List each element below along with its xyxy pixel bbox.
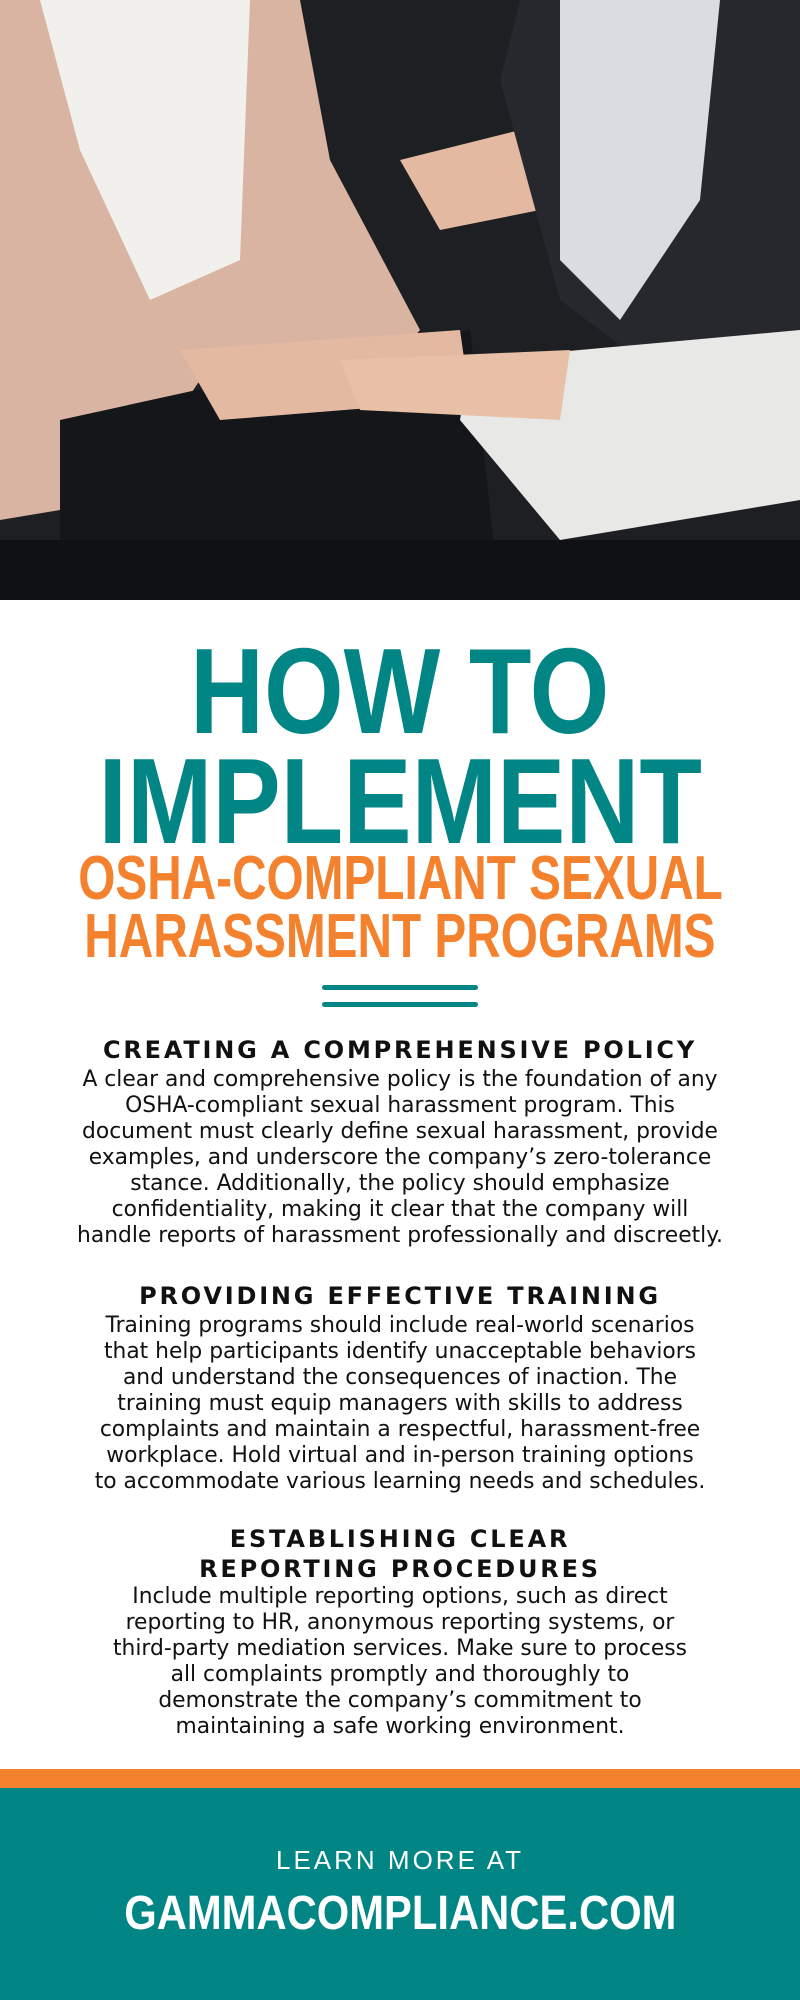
- heading: ESTABLISHING CLEAR: [230, 1525, 570, 1553]
- heading: REPORTING PROCEDURES: [199, 1555, 601, 1583]
- body text: reporting to HR, anonymous reporting systems, or: [126, 1610, 674, 1635]
- learn more text: LEARN MORE AT: [276, 1845, 524, 1875]
- body text: [95, 1313, 705, 1494]
- body text: and understand the consequences of inaction. The: [123, 1365, 677, 1390]
- section: reporting procedures: [113, 1525, 687, 1739]
- subtitle: HARASSMENT PROGRAMS: [84, 902, 716, 971]
- body text: [113, 1584, 687, 1739]
- body text: third-party mediation services. Make sure to process: [113, 1636, 687, 1661]
- heading: CREATING A COMPREHENSIVE POLICY: [103, 1036, 697, 1064]
- section: comprehensive policy: [77, 1036, 723, 1248]
- title: HOW TO IMPLEMENT: HOW TO: [190, 623, 610, 759]
- subtitle: OSHA-COMPLIANT SEXUAL: [78, 844, 722, 913]
- section: training: [95, 1282, 705, 1494]
- divider: [322, 985, 478, 1007]
- body text: Training programs should include real-world scenarios: [105, 1313, 695, 1338]
- body text: handle reports of harassment professionally and discreetly.: [77, 1223, 723, 1248]
- body text: examples, and underscore the company’s zero-tolerance: [89, 1145, 711, 1170]
- title: HOW TO IMPLEMENT: IMPLEMENT: [98, 733, 702, 869]
- subtitle: [78, 844, 722, 971]
- body text: A clear and comprehensive policy is the foundation of any: [82, 1067, 718, 1092]
- url: GAMMACOMPLIANCE.COM: [124, 1887, 676, 1940]
- body text: demonstrate the company’s commitment to: [158, 1688, 642, 1713]
- body text: that help participants identify unacceptable behaviors: [104, 1339, 696, 1364]
- body text: workplace. Hold virtual and in-person training options: [106, 1443, 694, 1468]
- body text: maintaining a safe working environment.: [175, 1714, 624, 1739]
- body text: [77, 1067, 723, 1248]
- photo: two people seated, hands comforting: [0, 0, 800, 600]
- body text: OSHA-compliant sexual harassment program. This: [125, 1093, 675, 1118]
- body text: all complaints promptly and thoroughly to: [171, 1662, 629, 1687]
- heading: [199, 1525, 601, 1583]
- heading: PROVIDING EFFECTIVE TRAINING: [139, 1282, 661, 1310]
- orange band: [0, 1769, 800, 1788]
- body text: document must clearly define sexual harassment, provide: [82, 1119, 718, 1144]
- body text: stance. Additionally, the policy should emphasize: [130, 1171, 670, 1196]
- body text: Include multiple reporting options, such as direct: [132, 1584, 668, 1609]
- footer: [0, 1788, 800, 2000]
- body text: to accommodate various learning needs and schedules.: [95, 1469, 705, 1494]
- body text: training must equip managers with skills to address: [117, 1391, 683, 1416]
- body text: confidentiality, making it clear that the company will: [112, 1197, 688, 1222]
- title: HOW TO IMPLEMENT: [98, 623, 702, 869]
- body text: complaints and maintain a respectful, harassment-free: [100, 1417, 700, 1442]
